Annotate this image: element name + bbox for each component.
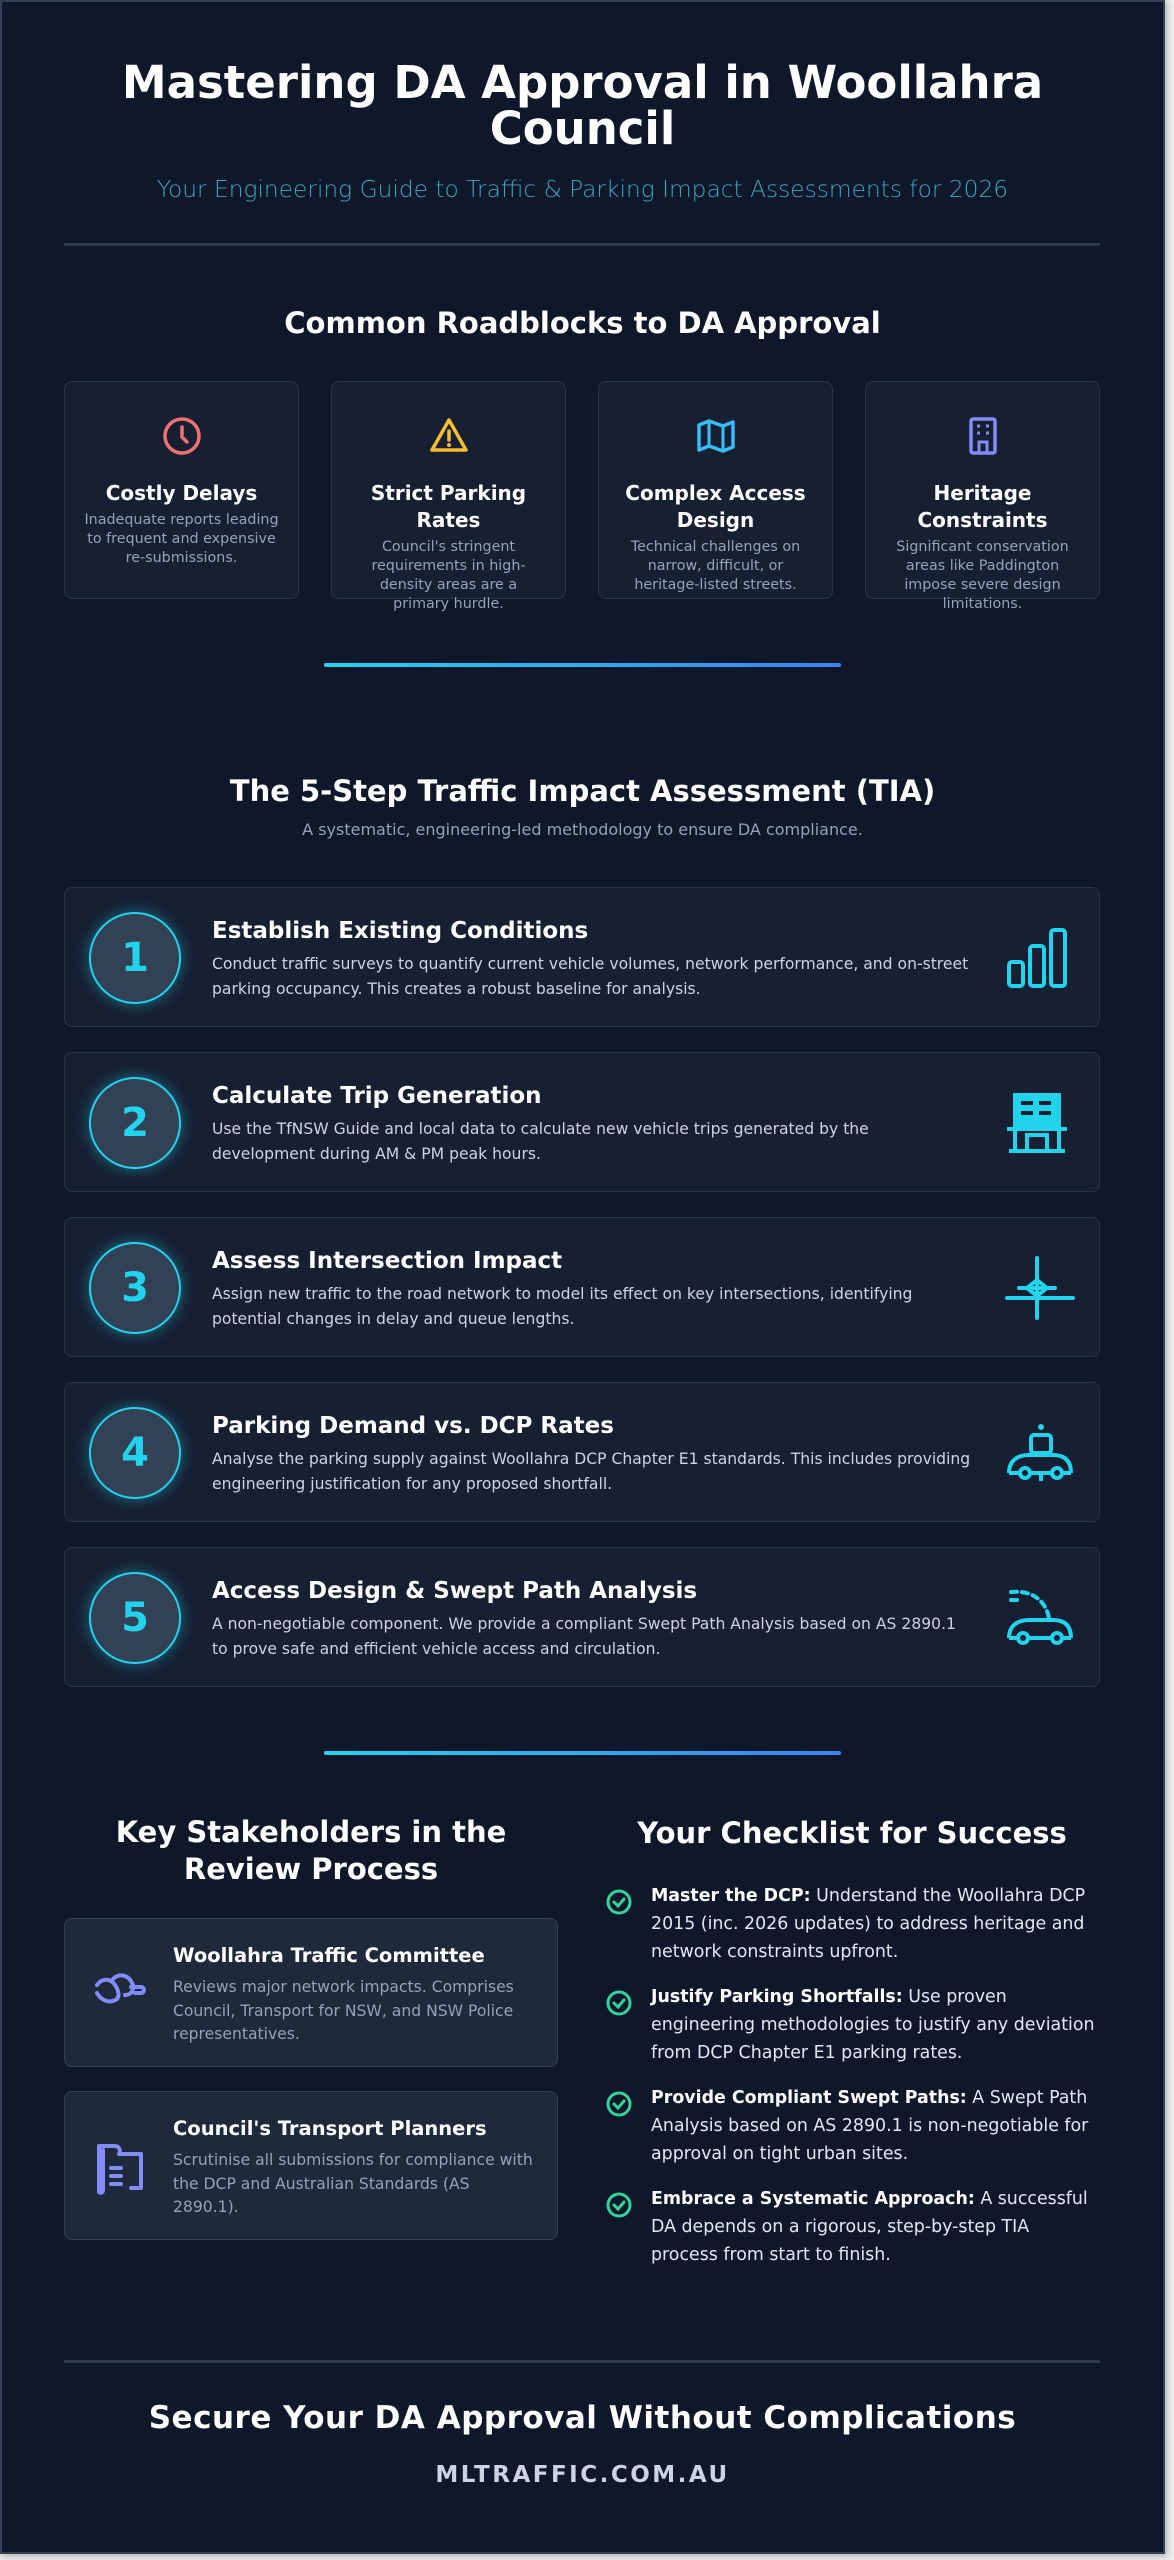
step 5: A non-negotiable component. We provide a compliant Swept Path Analysis based on AS 2890.1 — [212, 1615, 956, 1633]
card: heritage: areas like Paddington — [906, 558, 1059, 574]
step 3: 3 — [121, 1265, 149, 1311]
stakeholder: transport planners: Council's Transport Planners — [173, 2117, 487, 2140]
icon: building — [1007, 1093, 1067, 1153]
card: strict parking: Council's stringent — [382, 539, 515, 555]
stakeholder: traffic committee: Council, Transport for NSW, and NSW Police — [173, 2002, 513, 2020]
heading: common roadblocks: Common Roadblocks to DA Approval — [284, 306, 881, 340]
title — [122, 56, 1043, 155]
heading: checklist: Your Checklist for Success — [637, 1816, 1067, 1850]
card: strict parking: requirements in high- — [371, 558, 526, 574]
icon: parked car — [1007, 1424, 1073, 1481]
checklist item 2 — [606, 1987, 1095, 2063]
step 5: to prove safe and efficient vehicle access and circulation. — [212, 1640, 660, 1658]
checklist item 3 — [606, 2088, 1088, 2164]
card: costly delays: Inadequate reports leading — [84, 512, 279, 528]
step 5: Access Design & Swept Path Analysis — [212, 1578, 697, 1604]
checklist item 4: process from start to finish. — [651, 2245, 891, 2265]
card: complex access: heritage-listed streets. — [634, 577, 797, 593]
step 5 — [64, 1547, 1100, 1687]
card: complex access: Technical challenges on — [631, 539, 800, 555]
card: complex access: narrow, difficult, or — [648, 558, 783, 574]
step 2: Use the TfNSW Guide and local data to calculate new vehicle trips generated by the — [212, 1120, 869, 1138]
card: strict parking: density areas are a — [380, 577, 517, 593]
card: complex access: Design — [677, 508, 754, 532]
step 2: Calculate Trip Generation — [212, 1083, 542, 1109]
heading: key stakeholders: Review Process — [184, 1852, 438, 1886]
icon: bar chart — [1007, 928, 1067, 988]
icon: clock — [163, 417, 201, 455]
step 5: 5 — [121, 1595, 149, 1641]
panel: roadblocks cards — [64, 381, 1100, 612]
card: heritage: impose severe design — [904, 577, 1061, 593]
title: Mastering DA Approval in Woollahra — [122, 56, 1043, 109]
card: costly delays: to frequent and expensive — [87, 531, 276, 547]
icon: clipboard — [96, 2144, 143, 2195]
icon: warning — [430, 418, 468, 452]
card: strict parking: Rates — [417, 508, 480, 532]
stakeholder: traffic committee: Reviews major network impacts. Comprises — [173, 1978, 514, 1996]
step 4 — [64, 1382, 1100, 1522]
step 1 — [64, 887, 1100, 1027]
checklist item 4 — [606, 2189, 1088, 2265]
card: costly delays: re-submissions. — [126, 550, 237, 566]
checklist item 3: approval on tight urban sites. — [651, 2144, 908, 2164]
stakeholder: traffic committee: representatives. — [173, 2025, 300, 2043]
step 1: Conduct traffic surveys to quantify current vehicle volumes, network performance, and on-street — [212, 955, 968, 973]
step 4: engineering justification for any proposed shortfall. — [212, 1474, 612, 1492]
step 1: parking occupancy. This creates a robust baseline for analysis. — [212, 980, 701, 998]
step 3: potential changes in delay and queue lengths. — [212, 1310, 574, 1328]
step 4: Parking Demand vs. DCP Rates — [212, 1413, 614, 1439]
step 2: 2 — [121, 1100, 149, 1146]
card: complex access — [598, 381, 833, 599]
icon: check — [606, 1890, 632, 1914]
icon: map — [697, 419, 735, 453]
checklist item 1: Master the DCP: Understand the Woollahra DCP — [651, 1886, 1085, 1906]
step 4: Analyse the parking supply against Woollahra DCP Chapter E1 standards. This includes providing — [212, 1450, 970, 1468]
text: limitations. — [943, 596, 1022, 612]
card: heritage: Significant conservation — [896, 539, 1069, 555]
checklist item 1: network constraints upfront. — [651, 1942, 898, 1962]
step 3: Assign new traffic to the road network to model its effect on key intersections, identifying — [212, 1285, 912, 1303]
stakeholder: traffic committee — [64, 1918, 558, 2067]
card: strict parking — [331, 381, 566, 599]
step 2 — [64, 1052, 1100, 1192]
checklist item 2: Justify Parking Shortfalls: Use proven — [651, 1987, 1007, 2007]
card: costly delays — [64, 381, 299, 599]
step 3 — [64, 1217, 1100, 1357]
checklist item 1 — [606, 1886, 1085, 1962]
checklist item 4: Embrace a Systematic Approach: A successful — [651, 2189, 1088, 2209]
stakeholder: traffic committee: Woollahra Traffic Committee — [173, 1944, 485, 1967]
step 3: Assess Intersection Impact — [212, 1248, 562, 1274]
checklist item 2: from DCP Chapter E1 parking rates. — [651, 2043, 962, 2063]
icon: intersection — [1005, 1256, 1075, 1320]
card: heritage: Constraints — [917, 508, 1048, 532]
footer title: Secure Your DA Approval Without Complications — [149, 2400, 1016, 2436]
step 1: 1 — [121, 935, 149, 981]
icon: handshake — [94, 1973, 146, 2004]
text: primary hurdle. — [393, 596, 504, 612]
subtitle: TIA: A systematic, engineering-led methodology to ensure DA compliance. — [302, 820, 863, 839]
card: heritage: Heritage — [934, 481, 1031, 505]
heading: key stakeholders: Key Stakeholders in the — [116, 1815, 506, 1849]
heading: key stakeholders — [116, 1815, 506, 1886]
subtitle: Your Engineering Guide to Traffic & Parking Impact Assessments for 2026 — [157, 176, 1008, 203]
step 4: 4 — [121, 1430, 149, 1476]
footer url: MLTRAFFIC.COM.AU — [435, 2462, 730, 2488]
icon: building — [969, 417, 997, 455]
stakeholder: transport planners — [64, 2091, 558, 2240]
checklist item 4: DA depends on a rigorous, step-by-step TIA — [651, 2217, 1029, 2237]
heading: 5-step TIA: The 5-Step Traffic Impact Assessment (TIA) — [230, 774, 935, 808]
card: heritage — [865, 381, 1100, 599]
icon: swept path car — [1007, 1590, 1073, 1645]
stakeholder: transport planners: 2890.1). — [173, 2198, 239, 2216]
card: costly delays: Costly Delays — [106, 481, 257, 505]
checklist item 3: Provide Compliant Swept Paths: A Swept Path — [651, 2088, 1087, 2108]
checklist item 3: Analysis based on AS 2890.1 is non-negotiable for — [651, 2116, 1088, 2136]
stakeholder: transport planners: Scrutinise all submissions for compliance with — [173, 2151, 533, 2169]
checklist item 1: 2015 (inc. 2026 updates) to address heritage and — [651, 1914, 1084, 1934]
step 1: Establish Existing Conditions — [212, 918, 588, 944]
stakeholder: transport planners: the DCP and Australian Standards (AS — [173, 2174, 470, 2192]
title: Council — [490, 102, 675, 155]
checklist item 2: engineering methodologies to justify any deviation — [651, 2015, 1095, 2035]
step 2: development during AM & PM peak hours. — [212, 1144, 541, 1162]
card: strict parking: Strict Parking — [371, 481, 526, 505]
card: complex access: Complex Access — [625, 481, 806, 505]
